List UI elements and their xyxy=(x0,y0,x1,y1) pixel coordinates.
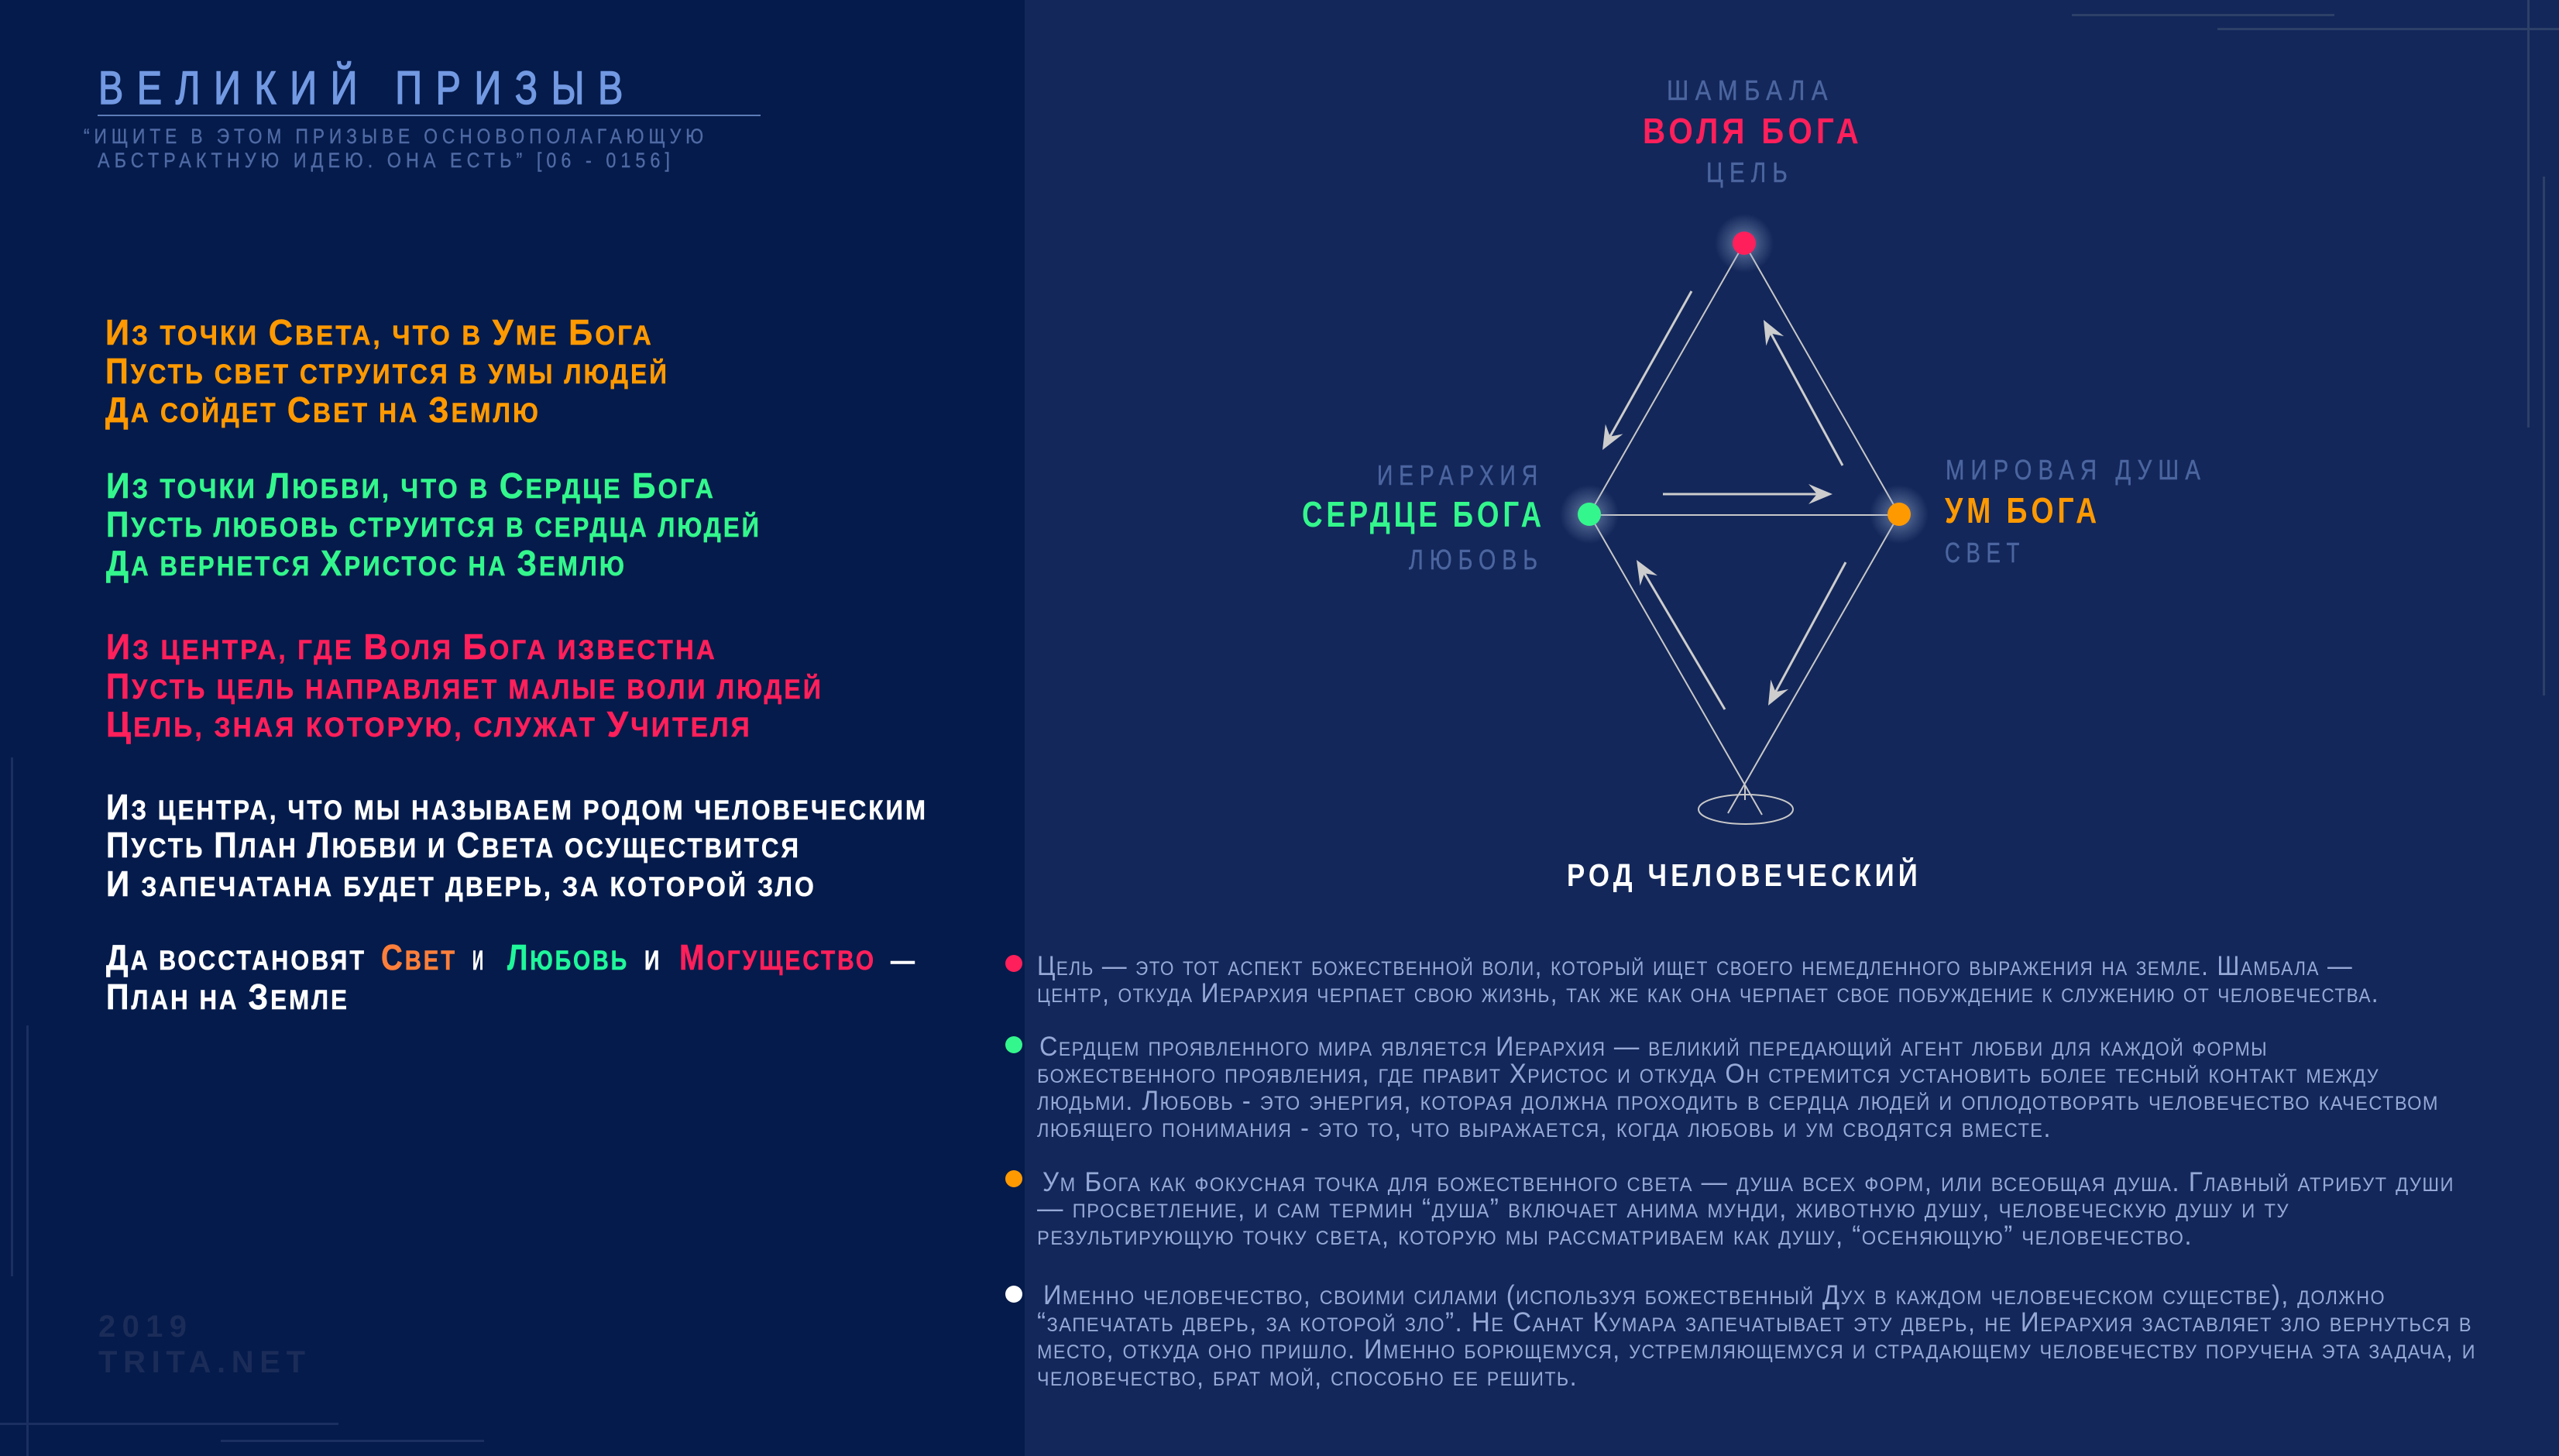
node: love xyxy=(1560,485,1619,544)
label: Shamballa: ВОЛЯ БОГА xyxy=(1643,111,1863,151)
poem stanza: light: ИЗ ТОЧКИ СВЕТА, ЧТО В УМЕ БОГА xyxy=(105,312,654,352)
subtitle quote: “ИЩИТЕ В ЭТОМ ПРИЗЫВЕ ОСНОВОПОЛАГАЮЩУЮ xyxy=(84,125,708,148)
poem stanza: will xyxy=(106,627,823,744)
text block: humanity: человечество, брат мой, способно ее решить. xyxy=(1037,1362,1578,1392)
label: Hierarchy: ЛЮБОВЬ xyxy=(1409,544,1544,575)
label: World Soul: МИРОВАЯ ДУША xyxy=(1946,454,2207,486)
arrow: light to humanity xyxy=(1775,562,1846,692)
poem stanza: humanity: ИЗ ЦЕНТРА, ЧТО МЫ НАЗЫВАЕМ РОДОМ ЧЕЛОВЕЧЕСКИМ xyxy=(106,787,928,827)
text block: heart: людьми. Любовь - это энергия, которая должна проходить в сердца людей и оплодотворять человечество качеством xyxy=(1037,1086,2439,1116)
label: Shamballa: ШАМБАЛА xyxy=(1667,74,1834,106)
text block: purpose: центр, откуда Иерархия черпает свою жизнь, так же как она черпает свое побуждение к служению от человечества. xyxy=(1037,978,2379,1008)
poem closing lines xyxy=(106,937,917,1017)
poem closing lines: СВЕТ xyxy=(381,937,457,977)
text block: heart: божественного проявления, где правит Христос и откуда Он стремится установить более тесный контакт между xyxy=(1037,1059,2379,1089)
label: World Soul xyxy=(1945,454,2207,568)
poem closing lines: ДА ВОССТАНОВЯТ xyxy=(106,937,366,977)
poem closing lines: ЛЮБОВЬ xyxy=(507,937,629,977)
label: humanity: РОД ЧЕЛОВЕЧЕСКИЙ xyxy=(1567,857,1922,893)
label: Hierarchy xyxy=(1302,459,1545,575)
footer: year and site: 2019 xyxy=(98,1310,187,1344)
node: light xyxy=(1870,485,1929,544)
poem stanza: humanity: ПУСТЬ ПЛАН ЛЮБВИ И СВЕТА ОСУЩЕСТВИТСЯ xyxy=(106,825,801,865)
arrow: humanity to love xyxy=(1644,573,1725,709)
text block: mind: — просветление, и сам термин “душа” включает анима мунди, животную душу, человеческую душу и ту xyxy=(1037,1193,2289,1224)
footer: year and site: TRITA.NET xyxy=(98,1345,305,1379)
poem closing lines: И xyxy=(644,946,661,976)
poem stanza: love: ДА ВЕРНЕТСЯ ХРИСТОС НА ЗЕМЛЮ xyxy=(106,543,627,583)
arrow: will to love xyxy=(1610,291,1692,437)
bullet: orange xyxy=(1005,1170,1022,1187)
poem closing lines: И xyxy=(472,946,485,976)
text block: humanity: место, откуда оно пришло. Именно борющемуся, устремляющемуся и страдающему человечеству поручена эта задача, и xyxy=(1037,1334,2476,1365)
poem stanza: light: ДА СОЙДЕТ СВЕТ НА ЗЕМЛЮ xyxy=(105,390,541,430)
poem closing lines: — xyxy=(891,946,917,976)
node: will xyxy=(1715,214,1774,273)
bullet: green xyxy=(1005,1036,1022,1053)
poem stanza: love: ИЗ ТОЧКИ ЛЮБВИ, ЧТО В СЕРДЦЕ БОГА xyxy=(106,465,716,506)
background: left panel xyxy=(0,0,1025,1456)
arrow: love to light xyxy=(1663,493,1817,496)
poem stanza: will: ЦЕЛЬ, ЗНАЯ КОТОРУЮ, СЛУЖАТ УЧИТЕЛЯ xyxy=(106,704,752,744)
poem closing lines: ПЛАН НА ЗЕМЛЕ xyxy=(106,977,349,1017)
poem stanza: light xyxy=(105,312,669,430)
poem closing lines: МОГУЩЕСТВО xyxy=(679,937,876,977)
label: Shamballa: ЦЕЛЬ xyxy=(1706,156,1794,188)
text block: mind xyxy=(1037,1167,2454,1251)
text block: purpose: Цель — это тот аспект божественной воли, который ищет своего немедленного выражения на земле. Шамбала — xyxy=(1037,951,2353,981)
poem stanza: humanity: И ЗАПЕЧАТАНА БУДЕТ ДВЕРЬ, ЗА КОТОРОЙ ЗЛО xyxy=(106,864,816,904)
arrow: light to will xyxy=(1771,334,1843,465)
text block: mind: Ум Бога как фокусная точка для божественного света — душа всех форм, или всеобщая душа. Главный атрибут души xyxy=(1042,1167,2454,1197)
bullet: white xyxy=(1005,1286,1022,1303)
text block: humanity: Именно человечество, своими силами (используя божественный Дух в каждом человеческом существе), должно xyxy=(1043,1280,2386,1310)
text block: humanity: “запечатать дверь, за которой зло”. Не Санат Кумара запечатывает эту дверь, не Иерархия заставляет зло вернуться в xyxy=(1037,1307,2472,1338)
text block: humanity xyxy=(1037,1280,2476,1392)
poem stanza: light: ПУСТЬ СВЕТ СТРУИТСЯ В УМЫ ЛЮДЕЙ xyxy=(105,351,669,391)
poem stanza: will: ИЗ ЦЕНТРА, ГДЕ ВОЛЯ БОГА ИЗВЕСТНА xyxy=(106,627,717,667)
diagram: triangles and figure xyxy=(1589,243,1899,824)
text block: heart: Сердцем проявленного мира является Иерархия — великий передающий агент любви для каждой формы xyxy=(1039,1032,2268,1062)
footer: year and site xyxy=(98,1310,305,1379)
label: World Soul: УМ БОГА xyxy=(1945,490,2100,531)
label: Hierarchy: СЕРДЦЕ БОГА xyxy=(1302,494,1545,534)
text block: heart: любящего понимания - это то, что выражается, когда любовь и ум сводятся вместе. xyxy=(1037,1113,2052,1143)
title underline xyxy=(98,115,761,116)
label: Shamballa xyxy=(1643,74,1863,188)
poem stanza: love: ПУСТЬ ЛЮБОВЬ СТРУИТСЯ В СЕРДЦА ЛЮДЕЙ xyxy=(106,504,761,544)
label: World Soul: СВЕТ xyxy=(1945,537,2025,568)
text block: mind: результирующую точку света, которую мы рассматриваем как душу, “осеняющую” человечество. xyxy=(1037,1221,2193,1251)
poem stanza: humanity xyxy=(106,787,928,904)
text block: purpose xyxy=(1037,951,2379,1008)
bullet: red xyxy=(1005,955,1022,972)
subtitle quote: АБСТРАКТНУЮ ИДЕЮ. ОНА ЕСТЬ” [06 - 0156] xyxy=(98,149,675,172)
poem stanza: will: ПУСТЬ ЦЕЛЬ НАПРАВЛЯЕТ МАЛЫЕ ВОЛИ ЛЮДЕЙ xyxy=(106,666,823,706)
poem stanza: love xyxy=(106,465,761,583)
title: ВЕЛИКИЙ ПРИЗЫВ xyxy=(98,62,637,114)
text block: heart xyxy=(1037,1032,2439,1143)
label: Hierarchy: ИЕРАРХИЯ xyxy=(1377,459,1544,491)
subtitle quote xyxy=(84,125,708,172)
